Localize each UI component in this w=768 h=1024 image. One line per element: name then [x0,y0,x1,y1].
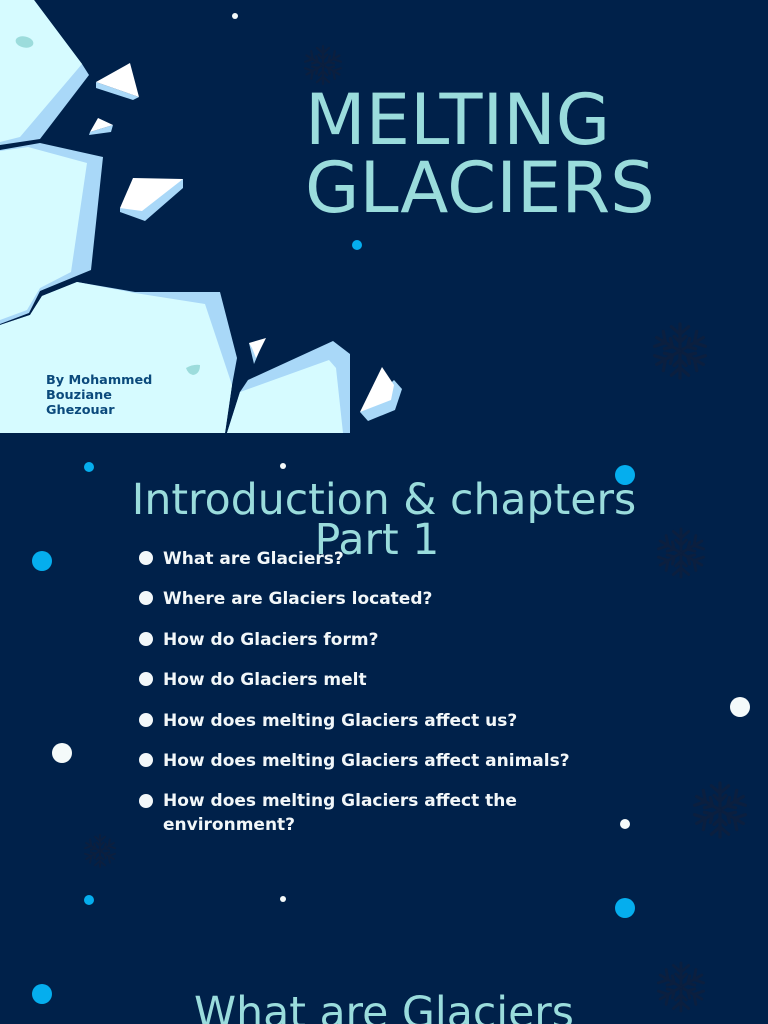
glacier illustration [0,0,402,433]
ice block: right [227,341,350,433]
list item: How does melting Glaciers affect animals? [163,751,570,771]
ice block: middle [0,143,103,324]
snowflake [304,46,342,84]
ice shard [89,118,113,135]
snowflake [652,324,708,378]
white snow dots [52,13,750,902]
snowflake [84,835,116,867]
ice shard [360,367,402,421]
title: MELTING [305,78,610,160]
list item: How does melting Glaciers affect the [163,791,517,811]
title: GLACIERS [305,146,655,228]
title [305,78,655,228]
list item: What are Glaciers? [163,548,344,568]
blue snow dots [32,240,635,1004]
heading: introduction and chapters: Introduction & chapters [132,475,636,525]
list item [139,791,517,835]
heading: introduction and chapters: Part 1 [315,515,439,565]
chapter list [139,548,570,835]
author credit: By Mohammed [46,373,152,388]
heading: introduction and chapters [132,475,636,565]
snowflake [656,529,706,577]
snowflake [692,783,748,837]
ice block: bottom [0,282,237,433]
ice shard [249,338,266,364]
list item: Where are Glaciers located? [163,589,432,609]
list item: How do Glaciers melt [163,670,367,690]
author credit: Ghezouar [46,403,115,418]
ice block: top [0,0,89,145]
list item: How do Glaciers form? [163,630,378,650]
snowflake [656,963,706,1011]
author credit: Bouziane [46,388,112,403]
ice shard [120,178,183,221]
author credit [46,373,152,418]
list item: environment? [163,815,295,835]
ice shard [96,63,139,100]
list item: How does melting Glaciers affect us? [163,710,517,730]
